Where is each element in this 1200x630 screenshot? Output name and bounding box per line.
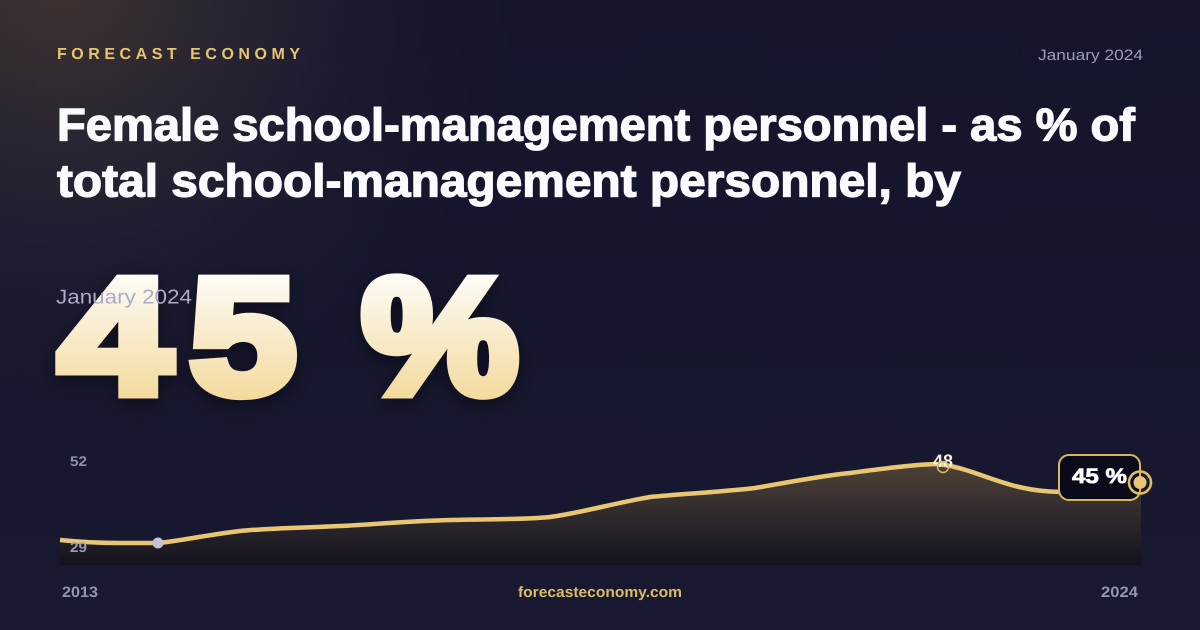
brand label: FORECAST ECONOMY <box>57 46 300 63</box>
chart line <box>60 464 1141 543</box>
title: Female school-management personnel - as % of <box>57 98 1136 150</box>
low point marker <box>152 538 164 548</box>
axis label max: 52 <box>70 453 87 469</box>
website footer: forecasteconomy.com <box>518 584 682 601</box>
high point marker <box>938 462 948 472</box>
start year label: 2013 <box>62 584 98 601</box>
axis label min: 29 <box>70 539 87 555</box>
big value: 5 <box>190 245 296 428</box>
title <box>57 98 1136 206</box>
big value: % <box>362 245 518 428</box>
big value <box>59 245 518 428</box>
area chart <box>60 451 1151 565</box>
date top right: January 2024 <box>1038 47 1143 64</box>
date overlapping value: January 2024 <box>56 286 192 308</box>
end year label: 2024 <box>1101 584 1139 601</box>
chart area fill <box>60 464 1141 565</box>
big value: 4 <box>59 245 171 428</box>
current value marker <box>1129 472 1151 494</box>
current value callout: 45 % <box>1072 465 1127 488</box>
current value callout <box>1059 455 1140 500</box>
title: total school-management personnel, by <box>57 154 961 206</box>
high point label: 48 <box>933 451 953 471</box>
